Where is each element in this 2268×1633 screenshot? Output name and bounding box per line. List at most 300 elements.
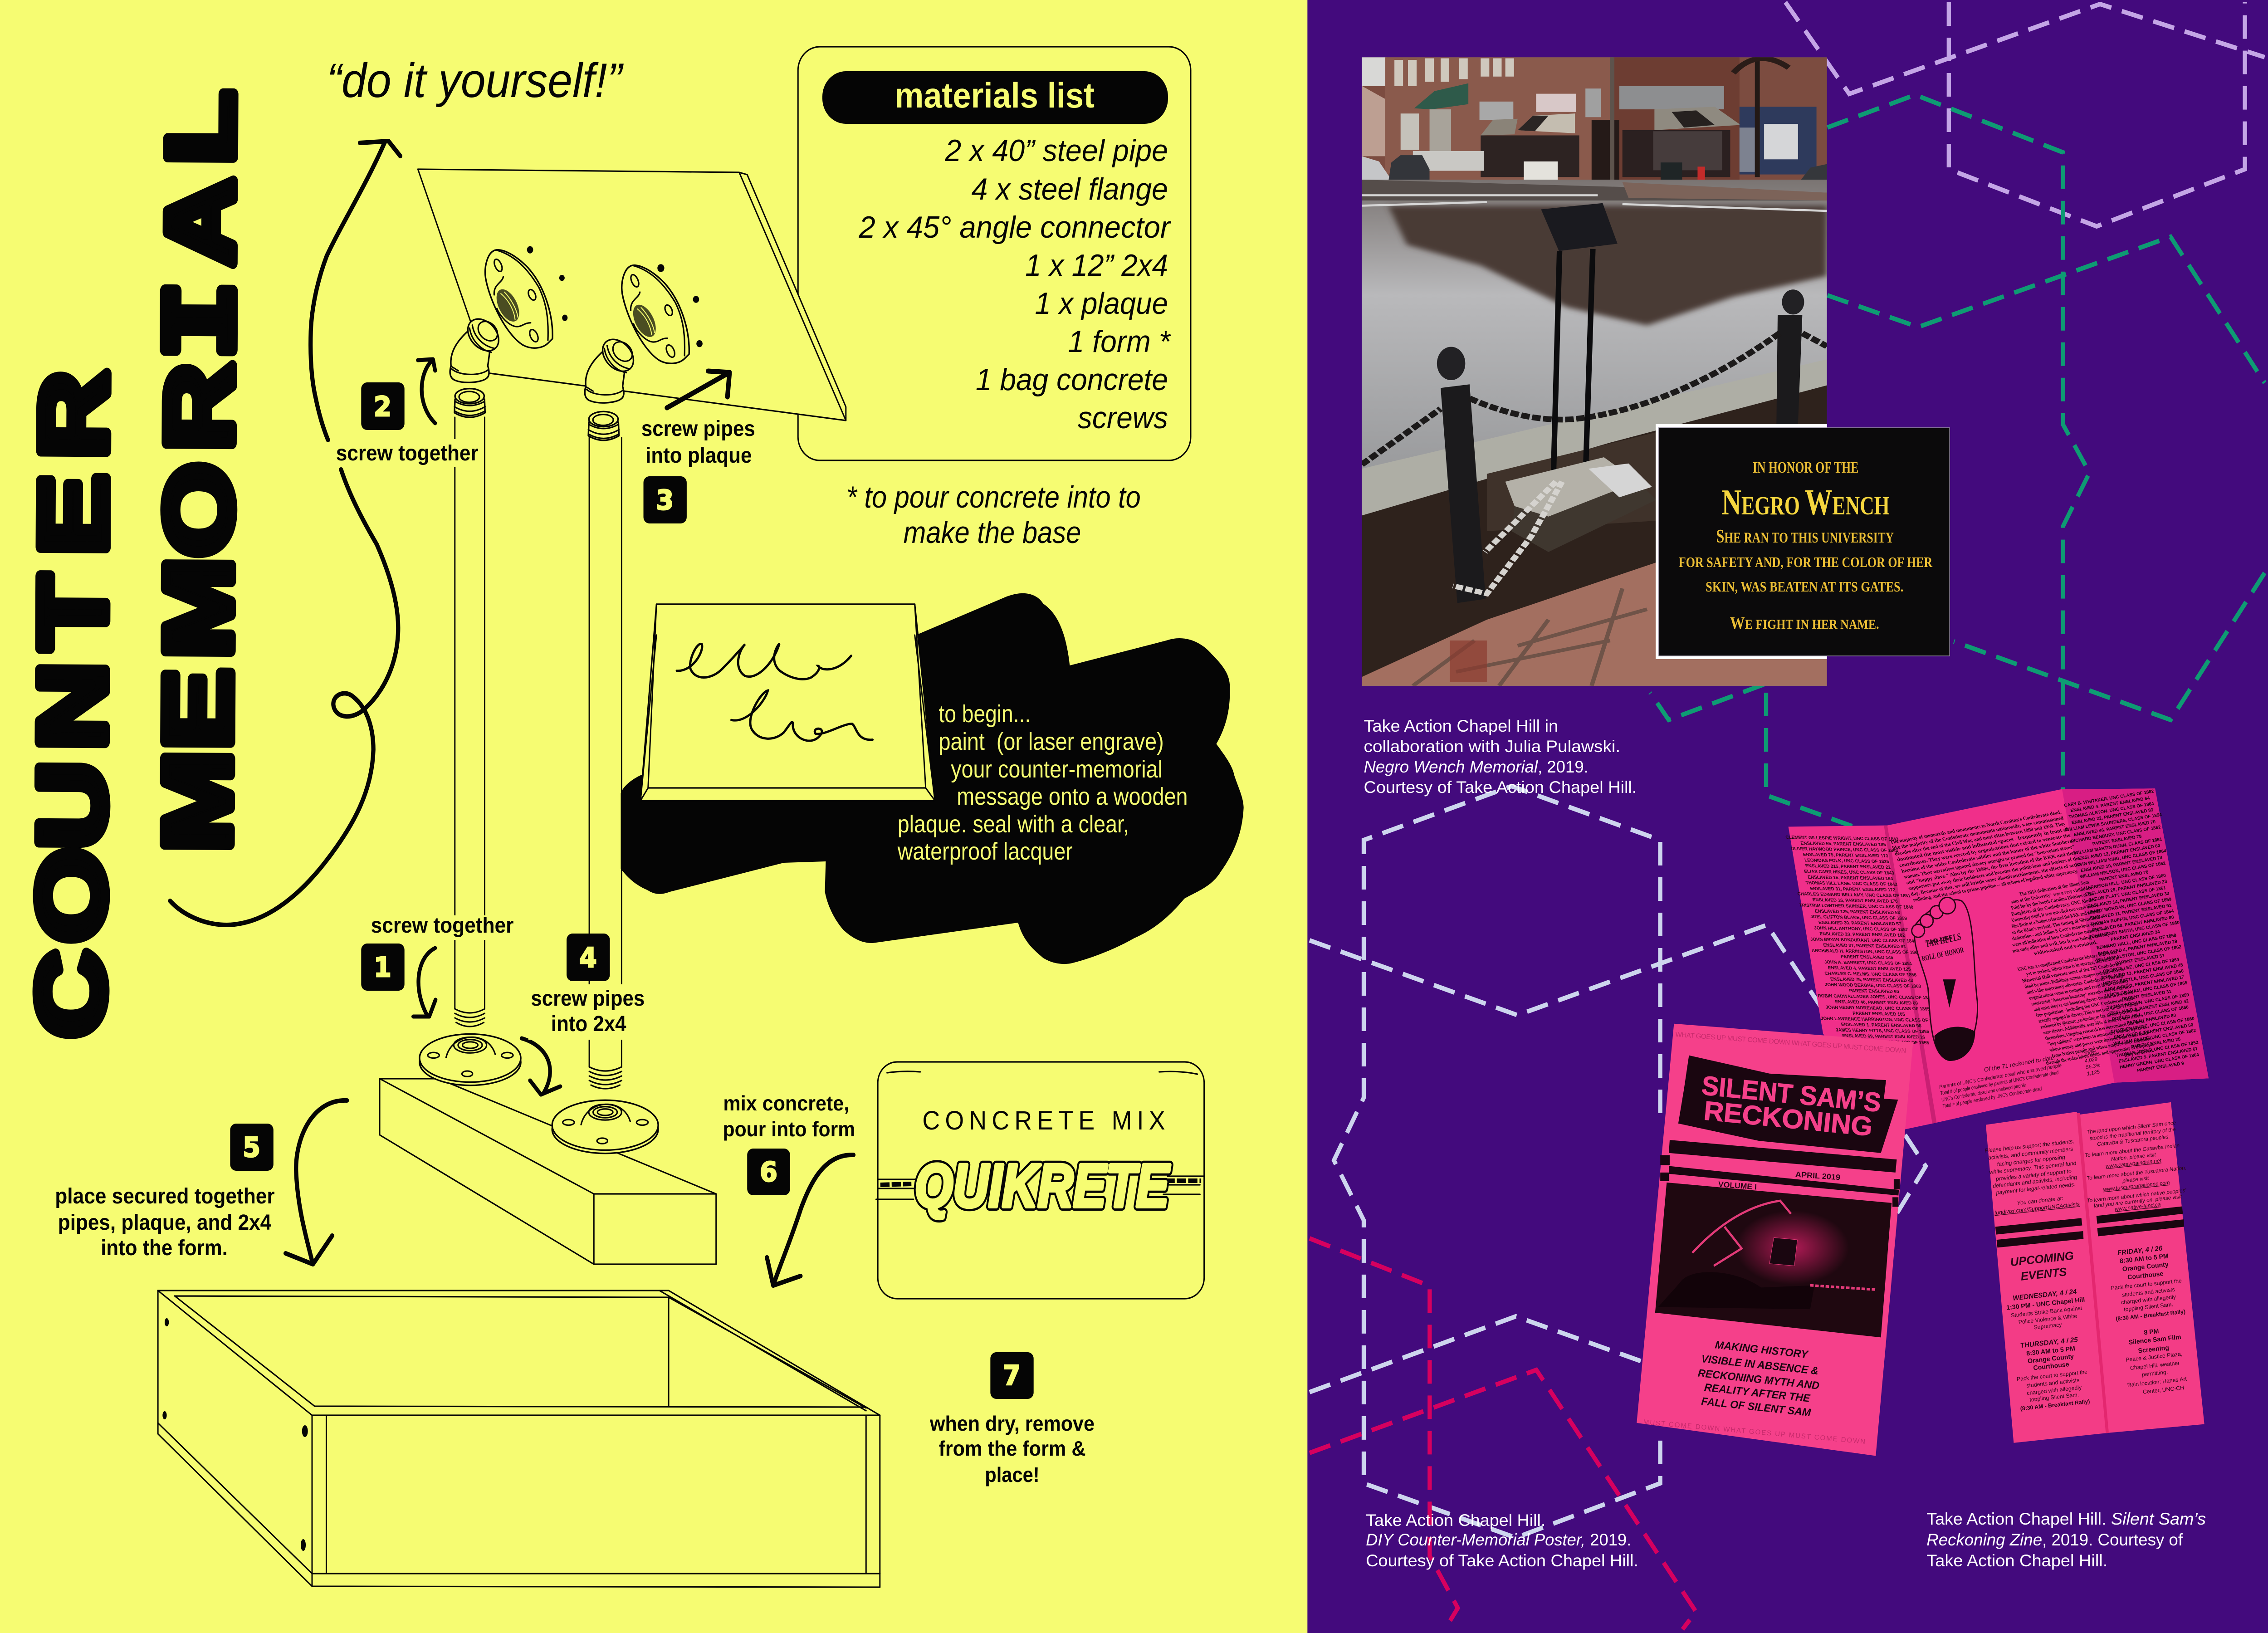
bag corner marks <box>887 1071 1198 1074</box>
pamphlet body text: were all indicative of how Confederate memory was <box>2011 926 2109 948</box>
materials list items: 1 x 12” 2x4 <box>1025 248 1168 283</box>
badge: step 1: 1 <box>374 951 391 983</box>
arrow: step 6 <box>767 1155 853 1286</box>
pamphlet statistics: 56.3% <box>2086 1062 2101 1071</box>
pamphlet left column: ENSLAVED 16, PARENT ENSLAVED 170 <box>1812 898 1898 904</box>
leaflet left panel text: 8:30 AM to 5 PM <box>2026 1345 2076 1358</box>
pamphlet right column: ENSLAVED 29, PARENT ENSLAVED 23 <box>2085 879 2168 897</box>
title word: memorial: MEMORIAL <box>144 90 265 852</box>
pamphlet right column: ENSLAVED 5, PARENT ENSLAVED 67 <box>2118 1046 2199 1064</box>
concrete mix label: CONCRETE MIX <box>922 1105 1165 1135</box>
footnote: form note: * to pour concrete into to <box>846 480 1141 514</box>
pamphlet right column: THOMAS ALSTON, UNC CLASS OF 1864 <box>2068 801 2155 820</box>
pamphlet right column: ROBERT HILL, UNC CLASS OF 1860 <box>2112 1005 2189 1022</box>
pamphlet right column: WILLIAM NELSON, UNC CLASS OF 1862 <box>2079 861 2166 880</box>
black blob <box>621 593 1244 964</box>
flange 2 <box>622 265 689 363</box>
heading: do it yourself: “do it yourself!” <box>327 53 624 108</box>
caption: reckoning zine: Take Action Chapel Hill. Silent Sam’s <box>1926 1510 2206 1528</box>
footnote: form note: make the base <box>904 515 1081 550</box>
pamphlet body text: heroism of the white Confederate soldier and the honor of the white Southern <box>1901 838 2074 874</box>
pipe 2 <box>589 438 621 1067</box>
leaflet left panel text: payment for legal-related needs. <box>1995 1181 2076 1196</box>
materials list items: 1 x plaque <box>1035 286 1168 321</box>
illustration: angled plaque with flanges and elbows <box>418 169 846 440</box>
badge: step 3: 3 <box>656 484 674 516</box>
label: place into the form: into the form. <box>101 1235 228 1260</box>
label: when dry <box>929 1413 1095 1486</box>
badge: step 7: 7 <box>1003 1359 1021 1392</box>
leaflet right panel text: permitting. <box>2141 1369 2168 1378</box>
pamphlet right column: ENSLAVED 10, PARENT ENSLAVED 74 <box>2080 855 2163 873</box>
pamphlet left column: JAMES HENRY FITTS, UNC CLASS OF 1855 <box>1835 1028 1930 1034</box>
arrow: long curved arrow upward <box>170 141 400 925</box>
leaflet right panel text: www.native-land.ca <box>2115 1201 2161 1213</box>
pamphlet statistics <box>1937 1046 2103 1109</box>
pamphlet right column: PARENT ENSLAVED 60 <box>2126 1013 2177 1026</box>
pamphlet body text: and insist they're not honoring slavers because so few of the <box>2033 990 2134 1012</box>
pamphlet body text: "boy soldiers" were heirs to immensely wealthy dynasties <box>2047 1024 2148 1047</box>
title: counter memorial <box>17 90 265 1038</box>
pamphlet right column: WILLIAM PEACE, UNC CLASS OF 1862 <box>2113 1028 2197 1046</box>
pamphlet left column: ENSLAVED 31, PARENT ENSLAVED 172 <box>1810 886 1896 893</box>
pamphlet right column: PARENT ENSLAVED 78 <box>2092 834 2142 847</box>
pamphlet left column: ENSLAVED 37, PARENT ENSLAVED 91 <box>1823 943 1907 949</box>
pamphlet body text <box>1889 810 2157 1083</box>
caption: memorial photo: collaboration with Julia Pulawski. <box>1364 737 1620 756</box>
illustration: 2x4 block with flanges <box>380 1034 716 1264</box>
pamphlet right column: ENSLAVED 22, PARENT ENSLAVED 83 <box>2071 807 2154 826</box>
pamphlet left column: OLIVER HAYWOOD PRINCE, UNC CLASS OF 1843 <box>1790 846 1899 853</box>
leaflet right panel text: Peace & Justice Plaza, <box>2126 1351 2183 1363</box>
elbow connector 2 <box>585 335 640 403</box>
pamphlet right column: RICHARD BENBURY, UNC CLASS OF 1862 <box>2071 825 2161 844</box>
inset text <box>1679 459 1933 632</box>
pamphlet statistics: Parents of UNC's Confederate dead who enslaved people <box>1939 1063 2062 1090</box>
label: screw pipes into 2x4: screw pipes <box>531 986 645 1010</box>
leaflet right panel text: Silence Sam Film <box>2128 1334 2181 1346</box>
materials list heading pill <box>822 71 1168 124</box>
pamphlet right column: CHARLES WHITE, UNC CLASS OF 1860 <box>2110 1016 2195 1035</box>
title word: counter: COUNTER <box>17 371 127 1038</box>
label: screw pipes into plaque: screw pipes <box>641 416 755 440</box>
leaflet left panel text: facing charges for opposing <box>1997 1154 2065 1168</box>
pamphlet body text: University itself, it was unveiled two years before <box>2011 903 2099 923</box>
screw dots <box>527 246 703 347</box>
pamphlet statistics: 1,125 <box>2087 1069 2101 1077</box>
pamphlet right column: JOHN HENRY SMITH, UNC CLASS OF 1860 <box>2088 920 2180 940</box>
pamphlet left column: CHARLES EDWARD BELLAMY, UNC CLASS OF 1851 <box>1797 892 1911 899</box>
pamphlet right column: WILLIAM MARTIN GUNN, CLASS OF 1861 <box>2074 837 2163 856</box>
pamphlet body text: like the majority of the Confederate monuments nationwide, were commissioned <box>1892 816 2065 851</box>
begin note text <box>897 700 1188 865</box>
pamphlet right column <box>2060 788 2209 1077</box>
leaflet left panel text: Courthouse <box>2033 1361 2069 1372</box>
pamphlet right column: TILMAN BROWN, UNC CLASS OF 1859 <box>2107 993 2190 1011</box>
label: screw pipes into 2x4 <box>528 984 648 1040</box>
materials list items: 2 x 45° angle connector <box>859 210 1172 244</box>
pamphlet right column: JOHN WILLIAM KING, UNC CLASS OF 1864 <box>2074 848 2167 868</box>
leaflet left panel text: WEDNESDAY, 4 / 24 <box>2012 1288 2077 1302</box>
leaflet right panel text: Rain location: Hanes Art <box>2127 1376 2187 1389</box>
pamphlet right column: HENRY BATTLE, UNC CLASS OF 1850 <box>2102 969 2184 987</box>
pamphlet left column: JOHN A. BARRETT, UNC CLASS OF 1851 <box>1824 960 1913 966</box>
wood block <box>380 1079 716 1264</box>
pamphlet body text: woman. Their narratives ignored slavery outright or praised the "benevolent slaver" <box>1903 844 2076 880</box>
pamphlet foot illustration: ROLL OF HONOR <box>1921 945 1965 963</box>
leaflet right panel text: toppling Silent Sam. <box>2123 1301 2173 1313</box>
pamphlet foot illustration <box>1912 897 1978 1061</box>
pamphlet left column: ENSLAVED 20, PARENT ENSLAVED 182 <box>1819 932 1906 938</box>
leaflet left panel text: Please help us support the students, <box>1984 1138 2074 1154</box>
pamphlet left column: JOEL CLIFTON BLAKE, UNC CLASS OF 1859 <box>1810 914 1908 921</box>
label: mix concrete <box>723 1092 855 1141</box>
pamphlet left column: JOHN HENRY MOREHEAD, UNC CLASS OF 1855 <box>1825 1005 1931 1012</box>
pamphlet left column: ENSLAVED 75, PARENT ENSLAVED 43 <box>1830 977 1914 983</box>
materials list items: 1 bag concrete <box>976 362 1168 397</box>
leaflet left panel text: activists, and community members <box>1988 1146 2073 1161</box>
leaflet right panel text: students and activists <box>2121 1286 2175 1298</box>
cover subtitle: VISIBLE IN ABSENCE & <box>1701 1353 1819 1377</box>
leaflet right panel text: Nation, please visit <box>2111 1151 2156 1162</box>
pamphlet body text: constructed "American bootstrap" narrative they've inherited <box>2030 984 2132 1007</box>
pamphlet right column: ENSLAVED 8, PARENT ENSLAVED 42 <box>2109 999 2190 1016</box>
leaflet left panel text: Supremacy <box>2033 1321 2063 1331</box>
leaflet left panel text <box>1984 1138 2090 1412</box>
elbow connector 1 <box>450 315 505 382</box>
leaflet left panel text: provides a variety of support to <box>1995 1168 2072 1182</box>
pamphlet right column: ENSLAVED 60, PARENT ENSLAVED 80 <box>2092 915 2175 933</box>
pamphlet body text: supporters put away their bedsheets and became the politicians and leaders of the <box>1907 856 2081 891</box>
pamphlet right column: ENSLAVED 4, PARENT ENSLAVED 64 <box>2070 796 2151 813</box>
pamphlet right column: EDWARD HALL, UNC CLASS OF 1858 <box>2096 933 2177 951</box>
pamphlet left column: ENSLAVED 125, PARENT ENSLAVED 53 <box>1814 909 1901 915</box>
pamphlet right column: ENSLAVED 6, PARENT ENSLAVED 50 <box>2114 1022 2194 1040</box>
pamphlet right column: WILLIAM ALSTON, UNC CLASS OF 1862 <box>2096 944 2182 963</box>
pamphlet left column: LEONIDAS POLK, UNC CLASS OF 1825 <box>1804 858 1890 865</box>
arrow: step 3 <box>667 371 729 408</box>
cover subtitle <box>1697 1339 1820 1419</box>
pamphlet right column: ENSLAVED 11, PARENT ENSLAVED 91 <box>2090 903 2172 921</box>
pamphlet statistics: Total # of people enslaved by parents of UNC's Confederate dead <box>1940 1070 2059 1096</box>
pamphlet right column: CARY B. WHITAKER, UNC CLASS OF 1862 <box>2064 789 2155 808</box>
pamphlet body text: they enslaved. <box>2123 1048 2155 1058</box>
arrow: step 2 <box>418 359 435 423</box>
cover subtitle: MAKING HISTORY <box>1715 1339 1809 1361</box>
leaflet right panel text: To learn more about which native peoples' <box>2087 1187 2187 1204</box>
leaflet right panel text: 8 PM <box>2144 1328 2159 1336</box>
pamphlet left column: ENSLAVED 30, PARENT ENSLAVED 57 <box>1818 920 1902 927</box>
badge: step 7 <box>990 1352 1034 1399</box>
leaflet right panel text: (8:30 AM - Breakfast Rally) <box>2116 1308 2186 1322</box>
leaflet right panel text: Pack the court to support the <box>2111 1277 2182 1291</box>
leaflet right panel text: Orange County <box>2122 1261 2169 1273</box>
materials list heading: materials list <box>894 75 1095 115</box>
inset text: SKIN, WAS BEATEN AT ITS GATES. <box>1706 579 1903 595</box>
background: purple gallery page <box>1307 0 2268 1633</box>
pamphlet left column: PARENT ENSLAVED 60 <box>1849 988 1900 994</box>
zine: open trifold pamphlet <box>1782 788 2209 1131</box>
leaflet right panel text: www.tuscaroranationnc.com <box>2103 1179 2170 1193</box>
badge: step 5 <box>230 1124 274 1171</box>
pamphlet left column: ENSLAVED 215, PARENT ENSLAVED 22 <box>1805 864 1892 870</box>
pamphlet left column: TRISTRIM LOWTHER SKINNER, UNC CLASS OF 1840 <box>1799 903 1914 910</box>
begin note text: plaque. seal with a clear, <box>898 811 1129 838</box>
leaflet left panel text: EVENTS <box>2020 1266 2068 1283</box>
pamphlet body text: Daughters of the Confederacy, UNC Alumni <box>2010 897 2097 917</box>
leaflet left panel text: THURSDAY, 4 / 25 <box>2020 1336 2078 1349</box>
pamphlet right column: ENSLAVED 13, PARENT ENSLAVED 45 <box>2101 963 2184 981</box>
pamphlet body text: organizations come to campus and revel in the carefully <box>2028 978 2130 1001</box>
pamphlet left column <box>1782 835 1945 1046</box>
leaflet left panel text: 1:30 PM - UNC Chapel Hill <box>2006 1296 2085 1312</box>
leaflet right panel text: 8:30 AM to 5 PM <box>2119 1252 2169 1265</box>
pamphlet left column: JOHN WOOD BERGHE, UNC CLASS OF 1860 <box>1824 983 1922 989</box>
form screws <box>162 1318 308 1551</box>
pamphlet body text: The 1913 dedication of the Silent Sam <box>2019 880 2090 897</box>
pamphlet body text: yet to reckon. Silent Sam is in storage, but tablets in <box>2025 955 2121 977</box>
leaflet right panel text: charged with allegedly <box>2121 1293 2176 1305</box>
pamphlet body text: Memorial Hall venerate most of the 287 Confederate <box>2021 961 2122 984</box>
pamphlet right column: THOMAS RUFFIN, UNC CLASS OF 1854 <box>2090 909 2175 927</box>
arrow: step 4 <box>522 1038 560 1095</box>
label: mix concrete: pour into form <box>723 1118 855 1141</box>
pamphlet left column: ENSLAVED 15, PARENT ENSLAVED 164 <box>1807 875 1894 881</box>
pamphlet body text: whose money and power were derived from lands stolen <box>2049 1030 2150 1053</box>
pamphlet body text: The majority of memorials and monuments to North Carolina's Confederate dead, <box>1889 810 2062 846</box>
zine: cover <box>1637 1024 1913 1456</box>
pamphlet left column: JOHN LAWRENCE HARRINGTON, UNC CLASS OF 1861 <box>1820 1016 1940 1023</box>
pamphlet body text: and "happy slave." Also by the 1890s, the first iteration of the KKK and their <box>1905 850 2078 885</box>
pamphlet right column: PARENT ENSLAVED 34 <box>2110 929 2160 942</box>
leaflet left panel text: (8:30 AM - Breakfast Rally) <box>2020 1398 2090 1412</box>
pamphlet body text: dead by name. Buildings across campus eulogize slavers <box>2024 967 2125 990</box>
pamphlet statistics: Of the 71 reckoned to date: <box>1984 1054 2056 1073</box>
leaflet right panel text: Catawba & Tuscarora peoples. <box>2097 1133 2170 1147</box>
cover title <box>1701 1071 1882 1142</box>
pamphlet left column: CHARLES C. HELMS, UNC CLASS OF 1856 <box>1824 971 1917 978</box>
pamphlet right column: ENSLAVED 14, PARENT ENSLAVED 33 <box>2087 891 2170 909</box>
materials list items: screws <box>1078 401 1168 435</box>
pamphlet body text: were slavers. Additionally, over 50% of those 71 were slavers <box>2042 1013 2143 1036</box>
cover photo: statue removal by crane <box>1655 1183 1892 1337</box>
pamphlet body text: in the Klan's revival. The timing of Silent Sam's <box>2011 914 2104 935</box>
inset: plaque close-up <box>1656 424 1950 659</box>
caption: memorial photo: Negro Wench Memorial , 2019. <box>1364 758 1589 776</box>
leaflet right panel text: To learn more about the Catawba Indian <box>2084 1142 2180 1159</box>
arrows: step direction arrows <box>286 359 853 1286</box>
pamphlet left column: ENSLAVED 69, PARENT ENSLAVED 16 <box>1842 1033 1926 1040</box>
cover title block <box>1678 1056 1898 1153</box>
cover issue labels: VOLUME I <box>1718 1180 1757 1191</box>
quikrete logo: QUIKRETE <box>915 1152 1170 1220</box>
pamphlet left column: JOHN BRYAN BONDURANT, UNC CLASS OF 1847 <box>1810 937 1917 944</box>
caption: memorial photo: Courtesy of Take Action Chapel Hill. <box>1364 778 1637 797</box>
pamphlet foot illustration: TAR HEELS <box>1924 931 1962 949</box>
footnote: form note <box>846 480 1141 550</box>
leaflet right panel text <box>2084 1120 2187 1395</box>
pamphlet statistics: 4,029 <box>2084 1056 2098 1064</box>
pamphlet right column: ENSLAVED 4, PARENT ENSLAVED 29 <box>2097 939 2178 957</box>
begin note text: paint (or laser engrave) <box>938 728 1164 755</box>
label: screw together (bottom): screw together <box>371 913 513 937</box>
memorial stand <box>1453 203 1656 594</box>
begin note text: to begin... <box>938 700 1031 728</box>
pamphlet body text: through the stolen labor, talent, and opportunity of the people <box>2045 1041 2155 1066</box>
leaflet left panel text: toppling Silent Sam. <box>2029 1391 2079 1403</box>
pamphlet right column: HARRISON HILL, UNC CLASS OF 1860 <box>2084 873 2166 891</box>
cars <box>1362 155 1827 198</box>
plaque scribble <box>677 644 873 741</box>
arrow: step 1 <box>413 948 435 1017</box>
caption: diy poster: DIY Counter-Memorial Poster, 2019. <box>1366 1530 1631 1549</box>
pamphlet right column: JACOB PLATT, UNC CLASS OF 1861 <box>2088 885 2166 903</box>
inset text: SHE RAN TO THIS UNIVERSITY <box>1716 526 1894 547</box>
cover issue labels <box>1718 1170 1841 1191</box>
label: when dry: place! <box>985 1464 1040 1486</box>
bag stripes <box>876 1176 1204 1199</box>
pamphlet body text: free population - including the UNC Confederate dead - <box>2035 996 2136 1018</box>
label: screw pipes into plaque <box>638 415 758 469</box>
flange 1 <box>485 250 552 348</box>
pamphlet right column: HENRY MORGAN, UNC CLASS OF 1859 <box>2087 897 2172 915</box>
caption: reckoning zine: Take Action Chapel Hill. <box>1926 1551 2107 1570</box>
cover subtitle: FALL OF SILENT SAM <box>1701 1395 1812 1419</box>
badge: step 2: 2 <box>374 391 391 423</box>
pamphlet body text: themselves. Ongoing research has determined that these <box>2044 1019 2146 1041</box>
leaflet right panel text: www.catawbaindian.net <box>2105 1157 2162 1169</box>
dashed hexagon pattern <box>1310 2 2265 1629</box>
cover title: RECKONING <box>1702 1096 1874 1142</box>
label: screw together (top): screw together <box>336 440 479 465</box>
base flange 1 <box>420 1034 521 1085</box>
pamphlet body text: film Birth of a Nation reformed the KKK and ushered <box>2011 908 2102 929</box>
cover subtitle: RECKONING MYTH AND <box>1697 1367 1820 1392</box>
plaque panel <box>418 169 846 420</box>
label: place into the form <box>55 1183 275 1260</box>
pamphlet left column: ENSLAVED 55, PARENT ENSLAVED 185 <box>1800 841 1887 847</box>
pamphlet right column: PARENT ENSLAVED 31 <box>2122 989 2172 1002</box>
leaflet left panel text: white supremacy. This general fund <box>1989 1160 2077 1175</box>
pipe bottom threads <box>455 1009 621 1089</box>
panel: black blob with begin note and wooden plaque <box>621 593 1244 964</box>
badge: step 1 <box>361 944 405 991</box>
pamphlet right column: ENSLAVED 46, PARENT ENSLAVED 70 <box>2073 820 2156 837</box>
pamphlet body text: Paid for by the North Carolina Division of the <box>2010 891 2095 911</box>
pamphlet left column: JOHN HILL ANTHONY, UNC CLASS OF 1857 <box>1813 926 1909 933</box>
pamphlet left column: CLEMENT GILLESPIE WRIGHT, UNC CLASS OF 1843 <box>1785 835 1899 842</box>
pamphlet statistics: Total # of people enslaved by UNC's Confederate dead <box>1942 1086 2043 1109</box>
pamphlet body text: whitewashed and varnished. <box>2033 940 2098 956</box>
label: place into the form: place secured together <box>55 1183 275 1208</box>
leaflet black bars <box>1995 1206 2184 1247</box>
pamphlet left column: ENSLAVED 4, PARENT ENSLAVED 125 <box>1828 966 1911 972</box>
begin note text: waterproof lacquer <box>897 838 1073 865</box>
inset text: WE FIGHT IN HER NAME. <box>1730 613 1879 632</box>
caption: reckoning zine <box>1926 1510 2206 1570</box>
label: screw pipes into 2x4: into 2x4 <box>551 1011 626 1036</box>
label: when dry: from the form & <box>938 1437 1086 1460</box>
leaflet left panel text: Pack the court to support the <box>2016 1369 2088 1383</box>
leaflet left panel text: You can donate at: <box>2017 1195 2063 1206</box>
caption: memorial photo <box>1364 717 1637 797</box>
pamphlet body text: and white supremacy advocates. Confederate "Heritage" <box>2026 973 2127 995</box>
bag outline <box>878 1062 1204 1299</box>
pamphlet body text: actually engaged in slavery. This is not true. Of the 71 names <box>2038 1001 2139 1024</box>
wet street <box>1362 180 1827 469</box>
base flange 2 <box>552 1100 658 1154</box>
leaflet left panel text: students and activists <box>2026 1377 2080 1389</box>
black bollards and chain <box>1362 289 1827 603</box>
pamphlet left column: ENSLAVED 1, PARENT ENSLAVED 96 <box>1841 1022 1922 1029</box>
pamphlet right column: ENSLAVED 12, PARENT ENSLAVED 60 <box>2078 843 2161 861</box>
pamphlet body text: day. Because of this, we still bristle voter disenfranchisement, the effects of active <box>1910 861 2083 897</box>
leaflet left panel text: Police Violence & White <box>2018 1313 2077 1325</box>
pamphlet body text: from Native people and whose empires were expanded <box>2051 1036 2153 1059</box>
pipe 1 top threads <box>455 389 485 417</box>
leaflet left panel text: defendants and activists, including <box>1993 1174 2077 1189</box>
pamphlet left column: ENSLAVED 79, PARENT ENSLAVED 173 <box>1803 852 1889 859</box>
zine: silent sam's reckoning <box>1637 788 2209 1456</box>
pamphlet body text: not only alive and well, but it was being carefully <box>2012 931 2111 954</box>
pamphlet left column: ELIAS CARR HINES, UNC CLASS OF 1843 <box>1804 869 1895 876</box>
pamphlet right column: THOMAS JONES, UNC CLASS OF 1852 <box>2116 1040 2199 1058</box>
leaflet right panel text: To learn more about the Tuscarora Nation, <box>2086 1164 2187 1181</box>
cover ghost text bottom: MUST COME DOWN WHAT GOES UP MUST COME DOWN <box>1643 1418 1866 1446</box>
leaflet right panel text: stood is the traditional territory of the <box>2089 1126 2176 1142</box>
leaflet right panel text: Courthouse <box>2127 1270 2164 1281</box>
badge: step 4: 4 <box>579 942 597 974</box>
badge: step 2 <box>361 382 405 430</box>
label: place into the form: pipes, plaque, and 2x4 <box>58 1210 271 1234</box>
leaflet right panel text: Center, UNC-CH <box>2142 1384 2185 1395</box>
background: yellow instruction page <box>0 0 1307 1633</box>
materials list items: 4 x steel flange <box>972 172 1168 206</box>
pipe 1 <box>455 417 485 1009</box>
pamphlet left column: ENSLAVED 40, PARENT ENSLAVED 60 <box>1835 1000 1919 1006</box>
cover issue labels: APRIL 2019 <box>1795 1170 1841 1182</box>
leaflet right panel text: Chapel Hill, weather <box>2130 1360 2180 1371</box>
sidewalk and mulch <box>1362 359 1827 686</box>
leaflet left panel text: UPCOMING <box>2010 1249 2074 1269</box>
zine: two-panel events leaflet <box>1984 1102 2204 1443</box>
caption: diy poster: Courtesy of Take Action Chapel Hill. <box>1366 1551 1638 1570</box>
label: mix concrete: mix concrete, <box>723 1092 849 1115</box>
illustration: concrete form box <box>158 1291 880 1587</box>
pamphlet left column: PARENT ENSLAVED 145 <box>1840 954 1894 960</box>
pamphlet right column: WILLIAM LEWIS SAUNDERS, CLASS OF 1854 <box>2065 812 2162 833</box>
cover ghost text top: WHAT GOES UP MUST COME DOWN WHAT GOES UP MUST COME DOWN <box>1675 1031 1906 1055</box>
pamphlet right column: GEORGE LEE, UNC CLASS OF 1864 <box>2102 957 2180 974</box>
leaflet right panel text: land you are currently on, please visit <box>2093 1193 2182 1209</box>
badge: step 3 <box>644 476 687 523</box>
materials list items <box>859 133 1172 435</box>
caption: reckoning zine: Reckoning Zine , 2019. Courtesy of <box>1926 1530 2183 1549</box>
caption: diy poster <box>1366 1511 1638 1570</box>
cover subtitle: REALITY AFTER THE <box>1704 1381 1811 1405</box>
materials box outline <box>798 47 1191 460</box>
pamphlet right column: PARENT ENSLAVED 57 <box>2115 953 2165 966</box>
pamphlet body text: sons of the University" was a very visible act <box>2010 885 2092 905</box>
cover title: SILENT SAM’S <box>1701 1071 1882 1118</box>
leaflet right panel text: Screening <box>2138 1344 2170 1355</box>
pamphlet left column: ROBIN CADWALLADER JONES, UNC CLASS OF 1844 <box>1818 993 1934 1001</box>
inset text: FOR SAFETY AND, FOR THE COLOR OF HER <box>1679 554 1933 570</box>
pamphlet statistics: UNC's Confederate dead who enslaved people <box>1941 1082 2026 1103</box>
photo: negro wench memorial on rainy street <box>1362 57 1827 686</box>
materials list items: 1 form * <box>1068 324 1171 359</box>
pamphlet foot illustration: 1861-1865 <box>1927 935 1952 946</box>
